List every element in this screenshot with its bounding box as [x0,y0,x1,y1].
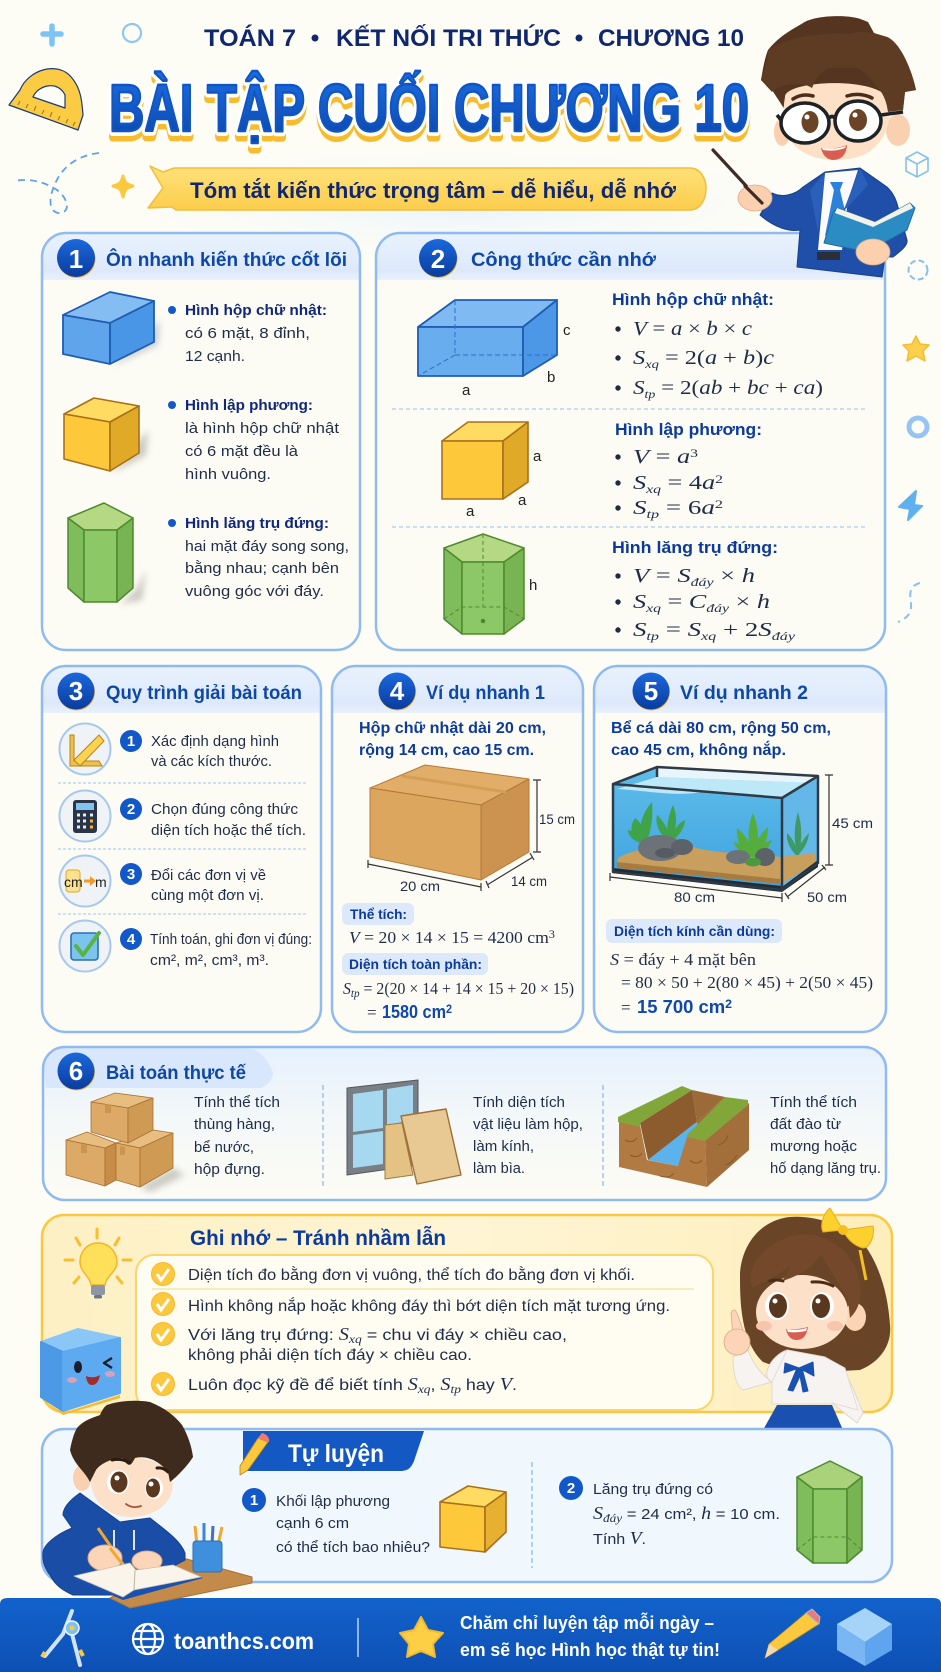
note 4: hay [461,1377,500,1394]
badge 3: 3 [69,676,83,706]
item: hinh lang tru dung [168,515,349,600]
fringe [761,32,916,112]
banner: tu luyen: Tự luyện [288,1440,384,1468]
heading 5: Ví dụ nhanh 2 [680,683,808,704]
calculation: glass area: S = đáy + 4 mặt bên [610,950,757,969]
exercise 2: đáy [603,1511,623,1525]
cheeks and mouth [756,1321,772,1331]
eyes [107,1470,129,1494]
note 4: S [440,1374,451,1394]
exercise 2: Lăng trụ đứng có [593,1481,713,1498]
badge 5: 5 [644,676,658,706]
hand pointing [724,1310,750,1355]
skirt [763,1405,843,1430]
heading 1: Ôn nhanh kiến thức cốt lõi [106,249,347,271]
label h: h [529,577,537,594]
formulas: lang tru: = [659,619,688,641]
calculation: surface: 1580 cm [382,1002,453,1022]
note 4: , [431,1377,440,1394]
eyes [802,111,818,133]
illustration: window and boards [347,1080,461,1184]
formulas: hop chu nhat: = 2( [659,347,705,369]
problem 5 [611,719,831,759]
formulas: hop chu nhat: S [633,347,645,369]
formulas: hop chu nhat [615,318,823,401]
pill: the tich [342,903,414,925]
formulas: lap phuong: a [701,497,715,519]
formulas: lang tru: đáy [691,575,714,589]
panel: tu luyen [42,1429,892,1582]
note 2: Hình không nắp hoặc không đáy thì bớt diện tích mặt tương ứng. [188,1296,670,1315]
icon: light bulb [65,1229,131,1298]
exercise 2: h = 10 cm. [701,1503,773,1523]
dimension labels: box [400,811,575,894]
formulas: hop chu nhat: a + b)c [705,347,772,369]
illustration: stacked boxes [66,1093,185,1192]
note 2 [152,1292,670,1316]
text: boxes: bể nước, [194,1139,254,1156]
text: trench [770,1094,881,1177]
mouth [821,145,847,160]
step 3: 3 [127,866,135,883]
problem 4 [359,720,546,759]
decorations: top left icons [13,24,141,213]
ear [73,1465,91,1491]
item: hinh lang tru dung: vuông góc với đáy. [185,583,324,600]
item: hinh lang tru dung: hai mặt đáy song song, [185,538,349,555]
formulas: lap phuong [615,446,723,521]
formulas: lang tru: × [714,565,742,587]
formulas: lang tru: S [633,619,646,641]
rocks [638,835,682,861]
frame [613,767,818,890]
badge 1: 1 [69,244,83,274]
character: teacher boy [713,16,916,277]
text: boxes: Tính thể tích [194,1094,280,1111]
slogan: em sẽ học Hình học thật tự tin! [460,1640,720,1660]
top line heading: CHƯƠNG 10 [598,25,744,52]
text: trench: hố dạng lăng trụ. [770,1160,881,1177]
panel 4: vi du 1 [332,666,583,1032]
heading 3: Quy trình giải bài toán [106,683,302,704]
step 2 [60,790,306,842]
website: toanthcs.com [174,1628,314,1654]
formulas: lang tru: tp [646,629,659,643]
heading 2: Công thức cần nhớ [471,250,657,271]
icon: star [400,1617,443,1657]
exercise 2: 2 [567,1480,575,1497]
eyebrows [112,1459,168,1472]
formulas: lang tru: × [729,591,757,613]
labels a a a [466,448,542,520]
blue neck bow [784,1362,814,1392]
formulas: hop chu nhat: V = a × b × c [633,318,752,340]
top line heading [204,24,744,52]
item: hinh lang tru dung: bằng nhau; cạnh bên [185,560,339,577]
dimension labels: aquarium: 50 cm [807,889,847,905]
labels a b c: c [563,322,571,339]
item: hinh lap phuong [168,397,340,483]
formulas: lap phuong: tp [647,507,659,521]
step 4: 4 [127,931,136,948]
note 3: xq [348,1332,362,1346]
exercise 2 [559,1476,780,1548]
pointer [713,150,762,203]
shape: yellow cube [64,398,148,473]
dimension labels: box: 20 cm [400,878,440,894]
text: trench: đất đào từ [770,1116,841,1133]
note 1: Diện tích đo bằng đơn vị vuông, thể tích đo bằng đơn vị khối. [188,1265,635,1284]
panel 5: vi du 2 [594,666,886,1032]
hair [70,1401,193,1482]
text: boxes [194,1094,280,1178]
pencil cup [195,1523,222,1545]
mouth [126,1504,141,1507]
text: boxes: thùng hàng, [194,1116,275,1133]
calculation: surface [343,979,574,1022]
item: hinh lap phuong: có 6 mặt đều là [185,443,299,460]
step 3: m [95,874,107,890]
calculation: glass area: 2 [725,997,732,1011]
formulas: lap phuong: S [633,472,646,494]
dimension labels: box: 14 cm [511,873,547,889]
labels a a a: a [533,448,542,465]
step 4 [60,920,312,972]
ear [844,1303,866,1331]
formulas: lap phuong: 2 [715,497,723,511]
step 1: Xác định dạng hình [151,733,279,750]
ears [774,118,790,146]
labels a a a: a [518,492,527,509]
slogan [460,1612,720,1660]
exercise 1: cạnh 6 cm [276,1515,349,1532]
dimension labels: box: 15 cm [539,811,575,827]
note 1 [152,1262,635,1286]
heading 6: Bài toán thực tế [106,1063,246,1084]
formulas: lap phuong: 3 [690,446,698,460]
shape: cube a [442,422,528,499]
calculation: volume: 3 [549,927,555,941]
formulas: lap phuong: 2 [715,472,723,486]
formulas: lang tru: h [742,565,755,587]
shape: prism h [444,534,524,634]
dimension labels: aquarium: 80 cm [674,889,715,905]
plants [628,802,809,857]
illustration: cardboard box [370,765,529,880]
item: hinh lap phuong: hình vuông. [185,466,271,483]
text: trench: Tính thể tích [770,1094,857,1111]
formulas: lang tru: V = S [633,565,687,587]
formulas: lang tru: = [661,591,689,613]
fringe [750,1234,861,1318]
formulas: lap phuong: = 4 [661,472,702,494]
note 3: không phải diện tích đáy × chiều cao. [188,1347,472,1364]
illustration: aquarium [613,767,818,892]
formulas: lang tru [615,565,796,643]
item: hinh hop chu nhat: có 6 mặt, 8 đỉnh, [185,325,310,342]
text: trench: mương hoặc [770,1138,857,1155]
item: hinh lang tru dung: Hình lăng trụ đứng: [185,515,329,532]
formulas: lang tru: xq [700,629,716,643]
exercise 2: = 24 cm², [622,1506,701,1523]
item: hinh lap phuong: Hình lập phương: [185,397,313,414]
step 2: 2 [127,801,135,818]
step 2: Chọn đúng công thức [151,801,299,818]
text: materials [473,1094,583,1177]
mascot: blue cube [41,1329,120,1415]
calculation: glass area: 15 700 cm [637,997,723,1017]
eyebrows [793,94,872,99]
formulas: lang tru: đáy [706,601,730,615]
formulas: lap phuong: = 6 [659,497,701,519]
inner note box [136,1255,713,1410]
formulas: lang tru: C [689,591,707,613]
text: materials: làm kính, [473,1138,534,1155]
formulas: lap phuong: xq [645,482,661,496]
labels a b c: a [462,382,471,399]
formulas: hop chu nhat: ab + bc + ca) [699,377,822,399]
icon: blue cube [837,1608,892,1666]
icon: globe [133,1624,163,1654]
shape: green prism [797,1461,862,1563]
dimensions: box [368,780,541,891]
badge 6 [58,1052,95,1090]
note 4 [152,1372,517,1396]
pill: dien tich kinh [606,919,782,943]
icon: compass [42,1611,83,1665]
pill: the tich: Thể tích: [350,906,407,922]
step 3 [60,856,266,906]
heading 4: Ví dụ nhanh 1 [426,683,545,704]
icon: pencil [240,1433,269,1475]
badge 4: 4 [390,676,405,706]
step 3: Đổi các đơn vị về [151,867,266,884]
formulas: hop chu nhat: tp [645,387,655,401]
calculation: surface: 2 [446,1002,452,1016]
problem 5: Bể cá dài 80 cm, rộng 50 cm, [611,719,831,737]
panel 1: on tap kien thuc [42,233,360,650]
heading: ghi nho: Ghi nhớ – Tránh nhầm lẫn [190,1226,446,1250]
formulas: lap phuong: a [702,472,715,494]
top line heading: TOÁN 7 [204,24,296,52]
step 4: cm², m², cm³, m³. [150,952,269,969]
labels a b c [462,322,571,399]
icon: pencil [765,1609,820,1658]
note 4: V. [500,1374,516,1394]
eyes [765,1292,789,1320]
exercise 2: Tính V. [593,1528,646,1548]
shape: green prism [68,503,146,604]
desk [110,1558,252,1608]
note 3: = chu vi đáy × chiều cao, [362,1327,567,1344]
formula title: hop chu nhat: Hình hộp chữ nhật: [612,290,774,309]
formulas: lang tru: h [757,591,770,613]
panel: ghi nho [41,1215,892,1415]
hoodie [43,1493,185,1595]
pill: dien tich toan phan: Diện tích toàn phần: [349,956,482,972]
problem 4: Hộp chữ nhật dài 20 cm, [359,720,546,737]
hand left [738,185,772,211]
step 3: cùng một đơn vị. [151,887,264,904]
eyebrows [770,1280,833,1286]
labels a b c: b [547,369,555,386]
note 4: tp [451,1382,461,1396]
illustration: trench [618,1086,749,1187]
exercise 1: Khối lập phương [276,1493,390,1510]
character: boy studying [43,1401,252,1608]
subtitle ribbon [148,166,706,210]
face [756,1275,848,1349]
shirt [733,1350,863,1423]
calculation: surface: = 2(20 × 14 + 14 × 15 + 20 × 15) [360,979,574,998]
exercise 2: S [593,1503,603,1523]
pencil and hands [98,1528,127,1570]
exercise 1 [242,1488,430,1556]
note 4: Luôn đọc kỹ đề để biết tính S [188,1374,417,1394]
dimensions: aquarium [610,775,833,902]
glasses [781,101,881,143]
calculation: glass area [610,950,873,1017]
text: materials: Tính diện tích [473,1094,565,1111]
badge 2: 2 [431,244,445,274]
subtitle ribbon: Tóm tắt kiến thức trọng tâm – dễ hiểu, dễ nhớ [190,178,676,203]
slogan: Chăm chỉ luyện tập mỗi ngày – [460,1612,714,1633]
note 3: Với lăng trụ đứng: S [188,1324,348,1344]
item: hinh hop chu nhat: Hình hộp chữ nhật: [185,302,327,319]
shape: yellow cube [440,1486,506,1552]
badge 1 [57,239,96,278]
formulas: lap phuong: V = a [633,446,687,468]
text: materials: vật liệu làm hộp, [473,1116,583,1133]
dimension labels: aquarium: 45 cm [832,815,873,831]
formulas: hop chu nhat: = 2( [655,377,700,399]
shirt and tie [818,170,858,250]
pill: dien tich kinh: Diện tích kính cần dùng: [614,923,775,939]
formulas: lap phuong: S [633,497,647,519]
formulas: lang tru: S [758,619,772,641]
formulas: lang tru: S [633,591,646,613]
item: hinh lap phuong: là hình hộp chữ nhật [185,420,340,437]
badge 3 [58,672,95,710]
shape: blue box [63,292,160,366]
problem 4: rộng 14 cm, cao 15 cm. [359,742,534,759]
formulas: lang tru: + 2 [716,619,758,641]
hair back [740,1217,890,1371]
calculation: volume: V = 20 × 14 × 15 = 4200 cm [349,928,542,947]
formulas: lang tru: xq [645,601,661,615]
panel 6: bai toan thuc te [43,1047,886,1200]
top line heading: KẾT NỐI TRI THỨC [336,24,561,52]
calculation: surface: = [367,1003,377,1022]
yellow hair bow [822,1208,873,1248]
step 1: 1 [127,733,135,750]
icon: protractor [9,69,83,130]
calculation: surface: tp [351,986,360,1000]
open book [824,203,915,252]
footer [0,1598,941,1672]
panel 2: cong thuc [376,233,885,650]
labels a a a: a [466,503,475,520]
step 1: và các kích thước. [151,753,272,770]
jacket [760,168,907,277]
item: hinh hop chu nhat: 12 cạnh. [185,348,245,365]
formula title: lang tru: Hình lăng trụ đứng: [612,538,778,557]
formulas: hop chu nhat: xq [644,357,659,371]
exercise 1: 1 [250,1492,258,1509]
badge 2 [419,239,458,278]
hair back [761,16,916,110]
calculation: surface: S [343,979,351,998]
badge 5 [632,672,670,710]
item: hinh hop chu nhat [168,302,327,365]
text: boxes: hộp đựng. [194,1161,265,1178]
character: girl [724,1208,890,1430]
formula title: lap phuong: Hình lập phương: [615,420,762,439]
shape: box a b c [418,300,557,376]
exercise 1: có thể tích bao nhiêu? [276,1539,430,1556]
dimension labels: aquarium [674,815,873,905]
face [783,83,890,160]
step 2: diện tích hoặc thể tích. [151,822,306,839]
formulas: hop chu nhat: S [633,377,645,399]
step 3: cm [64,874,83,890]
panel 3: quy trinh [42,666,321,1032]
formulas: lang tru: S [688,619,701,641]
formulas: lang tru: đáy [772,629,796,643]
calculation: glass area: = [621,998,631,1017]
decorations: right side [898,152,929,622]
step 4: Tính toán, ghi đơn vị đúng: [150,931,312,948]
badge 4 [378,672,416,710]
note 4: xq [417,1382,431,1396]
face [91,1457,173,1517]
open book [72,1566,203,1600]
badge 6: 6 [69,1056,83,1086]
note 3 [152,1322,567,1364]
step 1 [60,724,279,774]
problem 5: cao 45 cm, không nắp. [611,740,786,759]
pill: dien tich toan phan [342,953,488,975]
calculation: glass area: = 80 × 50 + 2(80 × 45) + 2(50 × 45) [621,973,873,992]
text: materials: làm bìa. [473,1160,525,1177]
banner: tu luyen [243,1431,424,1471]
